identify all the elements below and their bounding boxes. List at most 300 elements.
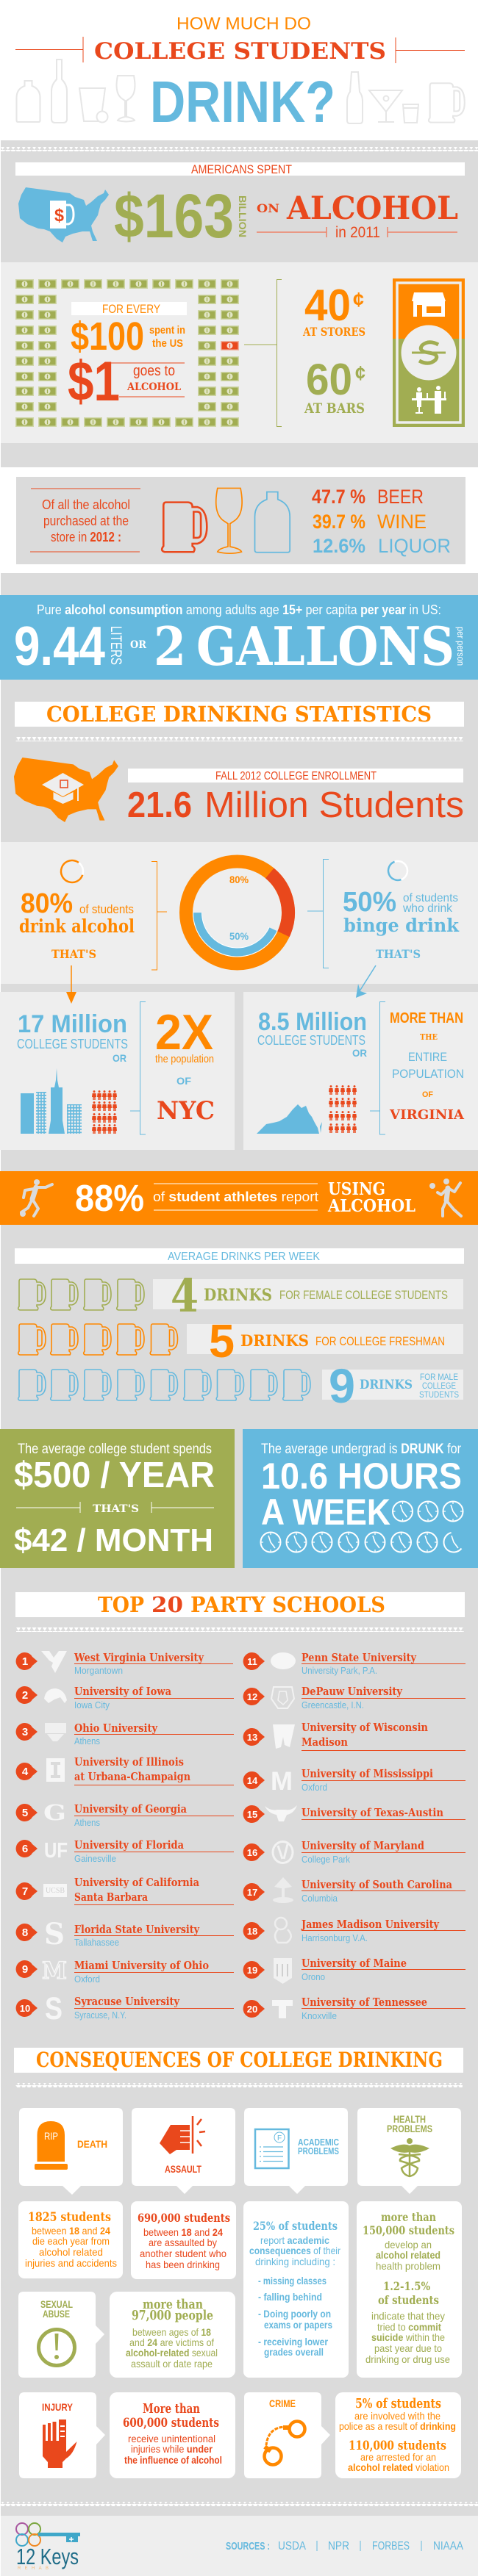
school 5: Athens — [74, 1817, 100, 1828]
row: female students: 4 — [171, 1269, 199, 1323]
school 16: 16 — [247, 1847, 257, 1858]
panel: drink and binge rates: binge drink — [343, 915, 460, 936]
school 5: University of Georgia — [74, 1803, 188, 1816]
card: crime text: police as a result of drinking — [339, 2420, 456, 2432]
card: assault text: are assaulted by — [149, 2237, 217, 2248]
icon: people grid — [329, 1085, 357, 1133]
school 10: 10 — [20, 2003, 30, 2014]
card: health text: more than — [381, 2210, 436, 2224]
card: academic icon — [244, 2108, 348, 2194]
school 20: Knoxville — [302, 2010, 337, 2021]
school 10: Syracuse University — [74, 1996, 180, 2008]
school 9: M — [42, 1957, 67, 1985]
list: party schools — [16, 1651, 465, 2026]
panel: for every 100 dollars: ¢ — [353, 288, 364, 311]
school 12: Greencastle, I.N. — [302, 1699, 364, 1710]
card: crime text: 5% of students — [355, 2396, 441, 2411]
school 9: 9 — [22, 1963, 28, 1976]
school 8: Florida State University — [74, 1924, 199, 1936]
icon: caduceus — [390, 2138, 429, 2177]
panel: store alcohol by type: store in 2012 : — [51, 530, 121, 544]
icon: tombstone — [35, 2121, 68, 2170]
school 18: 18 — [247, 1926, 257, 1937]
panel: student athletes: USING — [328, 1179, 385, 1199]
card: academic text: drinking including : — [255, 2256, 335, 2267]
panel: drink and binge rates: 50% — [343, 887, 396, 918]
panel: student athletes: of student athletes report — [153, 1190, 318, 1204]
panel: americans spent — [15, 162, 465, 251]
school 4 — [16, 1756, 234, 1785]
school 14: Oxford — [302, 1782, 327, 1793]
panel: hours drunk — [243, 1429, 478, 1568]
panel: 8.5 million: POPULATION — [392, 1067, 464, 1081]
icon: failed paper: F — [277, 2134, 282, 2143]
panel: pure alcohol consumption: per person — [455, 627, 466, 666]
school 19: Orono — [302, 1971, 325, 1982]
panel: store alcohol by type: 12.6% — [313, 535, 365, 557]
card: assault text: has been drinking — [146, 2259, 220, 2270]
card: academic text: grades overall — [264, 2346, 324, 2358]
school 8: 8 — [22, 1926, 28, 1939]
card: crime text: are involved with the — [354, 2410, 440, 2422]
school 12 — [243, 1685, 465, 1710]
arrow: down to 17 million — [66, 965, 76, 1004]
panel: americans spent: ALCOHOL — [286, 190, 458, 227]
panel: pure alcohol consumption: 9.44 — [14, 615, 105, 677]
title: HOW MUCH DO — [176, 14, 311, 34]
panel: hours drunk: A WEEK — [261, 1492, 390, 1533]
panel: enrollment — [14, 758, 464, 825]
panel: average spending: $500 / YEAR — [14, 1456, 215, 1495]
panel: average drinks per week: AVERAGE DRINKS PER WEEK — [168, 1251, 320, 1263]
icon: bill with store and bar — [393, 278, 465, 427]
card: academic text: consequences of their — [249, 2245, 340, 2256]
card: academic text: - falling behind — [258, 2291, 322, 2303]
card: sexual abuse text: alcohol-related sexual — [126, 2347, 218, 2359]
icon: nyc skyline — [21, 1068, 82, 1134]
school 2: University of Iowa — [74, 1685, 172, 1698]
school 15: University of Texas-Austin — [302, 1807, 443, 1819]
card: death icon: DEATH — [77, 2138, 107, 2150]
school 12: DePauw University — [302, 1685, 403, 1698]
icon: failed paper — [255, 2129, 288, 2168]
school 12: 12 — [247, 1691, 257, 1702]
panel: 8.5 million: ENTIRE — [408, 1050, 447, 1064]
school 9: Oxford — [74, 1974, 100, 1985]
row: freshmen: FOR COLLEGE FRESHMAN — [315, 1334, 445, 1348]
school 2: 2 — [22, 1689, 28, 1702]
icon: usa map with mug — [18, 187, 109, 242]
panel: americans spent: ON — [257, 201, 279, 215]
panel: drink and binge rates: drink alcohol — [19, 915, 135, 937]
panel: average spending — [0, 1429, 235, 1568]
card: sexual abuse icon — [18, 2292, 104, 2378]
card: sexual abuse text — [110, 2292, 235, 2378]
card: sexual abuse icon: SEXUAL — [40, 2298, 73, 2310]
panel: store alcohol by type: LIQUOR — [378, 535, 451, 557]
card: assault text: another student who — [140, 2248, 226, 2259]
school 14 — [243, 1767, 465, 1796]
school 16: College Park — [302, 1854, 350, 1865]
arrow: binge to 8.5 million — [356, 965, 376, 998]
school 7: University of California — [74, 1877, 200, 1889]
panel: enrollment: FALL 2012 COLLEGE ENROLLMENT — [215, 770, 377, 782]
logo: 12 keys rehab — [16, 2523, 80, 2571]
card: health text: develop an — [385, 2239, 432, 2251]
row: freshmen: 5 — [209, 1314, 235, 1367]
icon: handcuffs — [265, 2422, 304, 2464]
card: injury text: 600,000 students — [123, 2416, 219, 2431]
school 1 — [16, 1651, 233, 1676]
panel: for every 100 dollars: $100 — [71, 314, 144, 359]
card: sexual abuse text: and 24 are victims of — [129, 2336, 214, 2348]
card: sexual abuse text: assault or date rape — [131, 2358, 213, 2370]
panel: 8.5 million: COLLEGE STUDENTS — [257, 1033, 365, 1048]
school 5: 5 — [22, 1807, 28, 1819]
panel: student athletes — [0, 1171, 478, 1225]
card: death icon — [19, 2108, 123, 2195]
panel: for every 100 dollars: 60 — [306, 355, 352, 404]
card: health text: tried to commit — [377, 2321, 441, 2333]
icon: hand with bandage — [43, 2420, 76, 2468]
school 7 — [16, 1877, 234, 1904]
panel: pure alcohol consumption: LITERS — [107, 626, 124, 665]
panel: for every 100 dollars: the US — [152, 337, 183, 350]
panel: hours drunk: 10.6 HOURS — [261, 1456, 462, 1497]
heading: top 20 party schools: PARTY SCHOOLS — [190, 1592, 385, 1617]
card: death text: between 18 and 24 — [32, 2225, 110, 2237]
card: academic text: report academic — [260, 2234, 329, 2246]
school 13 — [243, 1721, 465, 1750]
school 1: Morgantown — [74, 1665, 123, 1676]
title: COLLEGE STUDENTS — [94, 38, 386, 65]
panel: student athletes: ALCOHOL — [327, 1196, 415, 1216]
panel: for every 100 dollars: spent in — [149, 324, 185, 337]
card: health text: alcohol related — [376, 2249, 440, 2261]
card: academic icon: PROBLEMS — [298, 2145, 339, 2156]
panel: 17 million: the population — [155, 1053, 214, 1065]
school 14: M — [271, 1767, 293, 1796]
school 3: 3 — [22, 1726, 28, 1738]
card: crime icon: CRIME — [269, 2397, 296, 2409]
card: crime icon — [244, 2392, 330, 2478]
panel: for every 100 dollars: 40 — [304, 281, 351, 330]
card: academic text: 25% of students — [253, 2219, 338, 2233]
panel: for every 100 dollars: FOR EVERY — [102, 302, 160, 316]
school 17: 17 — [247, 1887, 257, 1898]
school 11: Penn State University — [302, 1652, 416, 1664]
card: health text — [357, 2201, 462, 2378]
school 6: University of Florida — [74, 1839, 185, 1852]
card: death text — [18, 2201, 123, 2278]
school 7: UCSB — [46, 1887, 65, 1895]
panel: americans spent: in 2011 — [335, 224, 380, 241]
card: injury icon: INJURY — [42, 2401, 74, 2413]
school 19 — [243, 1957, 465, 1984]
school 2: Iowa City — [74, 1699, 110, 1710]
row: male students: STUDENTS — [419, 1389, 459, 1400]
card: death text: die each year from — [32, 2235, 110, 2247]
school 10 — [16, 1991, 234, 2026]
school 4: at Urbana-Champaign — [74, 1771, 190, 1783]
school 20 — [243, 1996, 465, 2021]
school 8: Tallahassee — [74, 1937, 119, 1948]
card: sexual abuse text: more than — [143, 2297, 203, 2312]
row: freshmen: DRINKS — [240, 1331, 309, 1350]
panel: drink and binge rates: THAT'S — [51, 947, 96, 961]
icon: usa map with mug: $ — [54, 206, 65, 226]
icon: volleyball player — [429, 1179, 461, 1216]
school 15 — [243, 1805, 465, 1823]
card: health text: suicide within the — [371, 2331, 445, 2343]
panel: drink and binge rates — [19, 841, 460, 1004]
school 16: University of Maryland — [302, 1840, 424, 1852]
icon: exclamation ring — [38, 2329, 75, 2366]
panel: for every 100 dollars: ¢ — [355, 361, 365, 384]
panel: americans spent: BILLION — [237, 195, 249, 237]
chart: donut — [165, 841, 309, 985]
school 9: Miami University of Ohio — [74, 1960, 209, 1972]
school 16 — [243, 1840, 465, 1865]
icon: soccer player — [20, 1179, 52, 1217]
panel: 8.5 million — [243, 965, 478, 1150]
school 8 — [16, 1917, 234, 1951]
panel: store alcohol by type: WINE — [377, 511, 427, 533]
card: crime text: are arrested for an — [360, 2451, 436, 2463]
icon: fist — [160, 2116, 205, 2154]
school 14: 14 — [247, 1775, 258, 1786]
icon: people grid — [92, 1090, 117, 1134]
card: injury icon — [19, 2392, 105, 2478]
card: assault text: between 18 and 24 — [143, 2226, 223, 2238]
card: academic text: - Doing poorly on — [258, 2308, 331, 2320]
icons: drink outlines — [16, 60, 465, 123]
card: health text: drinking or drug use — [365, 2353, 450, 2365]
chart: donut: 80% — [229, 874, 249, 885]
panel: 17 million — [0, 992, 235, 1150]
panel: average spending: THAT'S — [93, 1503, 139, 1515]
row: male students: COLLEGE — [422, 1381, 456, 1391]
panel: enrollment: 21.6 — [127, 785, 192, 825]
sources: USDA — [278, 2540, 306, 2552]
school 5: G — [43, 1800, 66, 1825]
panel: 17 million: NYC — [157, 1096, 215, 1126]
title: DRINK? — [150, 69, 335, 134]
card: sexual abuse text: 97,000 people — [132, 2308, 213, 2323]
card: health text: 1.2-1.5% — [383, 2279, 430, 2293]
card: injury text: injuries while under — [131, 2443, 213, 2455]
card: health icon: PROBLEMS — [387, 2123, 432, 2134]
heading: college drinking statistics: COLLEGE DRINKING STATISTICS — [46, 702, 432, 727]
school 7: Santa Barbara — [74, 1891, 149, 1904]
school 13: University of Wisconsin — [302, 1721, 428, 1734]
panel: pure alcohol consumption: Pure alcohol consumption among adults age 15+ per capita per year in US: — [37, 602, 441, 617]
school 15: 15 — [247, 1809, 257, 1820]
card: health text: health problem — [376, 2260, 440, 2272]
panel: 17 million: OF — [176, 1075, 191, 1087]
panel: 8.5 million: THE — [420, 1032, 438, 1042]
panel: store alcohol by type: 47.7 % — [312, 486, 365, 508]
row: male students: 9 — [329, 1359, 355, 1413]
card: health icon: HEALTH — [393, 2113, 426, 2125]
school 17: Columbia — [302, 1893, 338, 1904]
card: academic text: - missing classes — [258, 2275, 327, 2287]
sources — [226, 2540, 463, 2552]
panel: 17 million: COLLEGE STUDENTS — [17, 1037, 128, 1051]
icon: small 50 percent ring — [385, 858, 410, 883]
panel: 8.5 million: VIRGINIA — [389, 1107, 465, 1123]
panel: average drinks per week — [15, 1248, 464, 1413]
panel: 8.5 million: OR — [352, 1047, 367, 1059]
panel: drink and binge rates: 80% — [21, 888, 73, 919]
school 3: Athens — [74, 1735, 100, 1746]
school 6: UF — [44, 1839, 68, 1863]
panel: for every 100 dollars: $1 — [68, 350, 120, 413]
heading: college drinking statistics — [15, 702, 464, 741]
panel: store alcohol by type: purchased at the — [43, 514, 129, 528]
chart: hundred dollar bills — [15, 279, 239, 427]
heading: top 20 party schools — [15, 1592, 465, 1632]
row: freshmen — [18, 1314, 463, 1367]
school 19: University of Maine — [302, 1957, 407, 1970]
school 6 — [16, 1839, 234, 1864]
panel: 17 million: OR — [113, 1052, 126, 1064]
card: sexual abuse text: between ages of 18 — [132, 2326, 211, 2338]
card: assault icon: ASSAULT — [165, 2163, 201, 2175]
school 14: University of Mississippi — [302, 1768, 433, 1780]
panel: for every 100 dollars: AT STORES — [302, 325, 365, 339]
panel: americans spent: AMERICANS SPENT — [191, 162, 292, 176]
sources: NPR — [328, 2540, 349, 2552]
card: death text: injuries and accidents — [25, 2257, 117, 2269]
panel: average spending: The average college student spends — [18, 1442, 212, 1457]
school 11 — [243, 1652, 465, 1676]
heading: top 20 party schools: TOP — [98, 1592, 144, 1617]
school 5 — [16, 1800, 234, 1828]
panel: store alcohol by type: BEER — [377, 486, 424, 508]
row: male students: DRINKS — [360, 1378, 413, 1392]
sources: NIAAA — [433, 2540, 463, 2552]
panel: enrollment: Million Students — [204, 785, 464, 825]
panel: drink and binge rates: of students — [79, 902, 134, 916]
card: injury text: receive unintentional — [128, 2433, 215, 2444]
school 2 — [16, 1685, 234, 1710]
school 3: Ohio University — [74, 1722, 158, 1735]
panel: for every 100 dollars: AT BARS — [304, 400, 365, 417]
title — [15, 14, 465, 134]
school 18: James Madison University — [300, 1918, 439, 1931]
school 9 — [16, 1957, 234, 1985]
panel: store alcohol by type — [16, 477, 465, 564]
panel: hours drunk: The average undergrad is DRUNK for — [261, 1442, 462, 1457]
school 10: Syracuse, N.Y. — [74, 2010, 126, 2021]
panel: for every 100 dollars: goes to — [133, 363, 175, 379]
panel: 8.5 million: 8.5 Million — [258, 1008, 367, 1036]
row: male students: FOR MALE — [420, 1372, 458, 1382]
row: female students: DRINKS — [204, 1286, 272, 1305]
heading: consequences — [14, 2048, 463, 2087]
icons: clocks — [260, 1502, 468, 1556]
school 4: 4 — [22, 1766, 29, 1778]
panel: drink and binge rates: who drink — [402, 902, 453, 915]
school 11: University Park, P.A. — [302, 1665, 377, 1676]
icon: usa map with graduation cap — [14, 758, 118, 822]
panel: store alcohol by type: Of all the alcohol — [42, 497, 130, 512]
school 11: 11 — [247, 1656, 257, 1667]
school 17: University of South Carolina — [302, 1879, 453, 1891]
school 13: 13 — [247, 1732, 257, 1743]
school 7: 7 — [22, 1885, 28, 1898]
card: crime text: alcohol related violation — [348, 2461, 449, 2473]
card: death text: 1825 students — [28, 2210, 111, 2225]
row: male students — [18, 1359, 463, 1413]
card: crime text — [335, 2392, 461, 2478]
card: injury text: More than — [143, 2401, 200, 2417]
logo: 12 keys rehab: REHAB — [18, 2566, 49, 2571]
card: health text: indicate that they — [371, 2310, 445, 2322]
panel: average spending: $42 / MONTH — [14, 1522, 213, 1558]
panel: 8.5 million: OF — [422, 1090, 433, 1099]
card: health text: of students — [378, 2293, 439, 2307]
school 18 — [243, 1918, 465, 1943]
panel: pure alcohol consumption: 2 — [154, 615, 186, 677]
panel: for every 100 dollars: ALCOHOL — [126, 381, 181, 393]
card: death text: alcohol related — [39, 2246, 103, 2258]
panel: student athletes: 88% — [75, 1177, 144, 1219]
heading: top 20 party schools: 20 — [151, 1592, 183, 1617]
chart: donut: 50% — [229, 930, 249, 942]
school 20: 20 — [247, 2004, 257, 2015]
card: academic text: exams or papers — [264, 2319, 332, 2331]
panel: pure alcohol consumption: OR — [130, 639, 146, 651]
panel: drink and binge rates: THAT'S — [376, 947, 421, 961]
school 6: 6 — [22, 1843, 28, 1855]
card: injury text — [110, 2392, 235, 2478]
card: health text: past year due to — [374, 2342, 442, 2354]
sources: FORBES — [372, 2540, 410, 2552]
school 20: University of Tennessee — [302, 1996, 427, 2009]
panel: 17 million: 17 Million — [18, 1010, 127, 1038]
panel: americans spent: $163 — [114, 181, 234, 251]
icon: small 80 percent ring — [58, 857, 86, 885]
school 4: University of Illinois — [74, 1756, 184, 1769]
card: academic icon: ACADEMIC — [298, 2137, 339, 2148]
icon: tombstone: RIP — [44, 2130, 58, 2142]
school 10: S — [45, 1991, 63, 2026]
card: injury text: the influence of alcohol — [124, 2454, 222, 2466]
panel: for every 100 dollars — [15, 278, 465, 427]
card: assault text: 690,000 students — [138, 2211, 230, 2225]
panel: 17 million: 2X — [155, 1004, 213, 1060]
panel: store alcohol by type: 39.7 % — [313, 511, 365, 533]
card: health text: 150,000 students — [363, 2223, 454, 2237]
icons: beer, wine, liquor — [162, 488, 290, 553]
sources: SOURCES : — [226, 2540, 270, 2552]
card: assault text — [131, 2201, 236, 2279]
icon: virginia — [257, 1104, 322, 1134]
school 6: Gainesville — [74, 1853, 116, 1864]
panel: drink and binge rates: of students — [403, 892, 458, 904]
card: health icon — [357, 2108, 461, 2194]
footer — [16, 2523, 463, 2571]
panel: 8.5 million: MORE THAN — [390, 1010, 463, 1026]
card: sexual abuse icon: ABUSE — [43, 2308, 70, 2320]
school 18: Harrisonburg V.A. — [302, 1932, 368, 1943]
school 17 — [243, 1877, 465, 1904]
school 13: Madison — [302, 1736, 348, 1749]
panel: pure alcohol consumption — [0, 595, 478, 680]
logo: 12 keys rehab: 12 Keys — [16, 2544, 79, 2569]
